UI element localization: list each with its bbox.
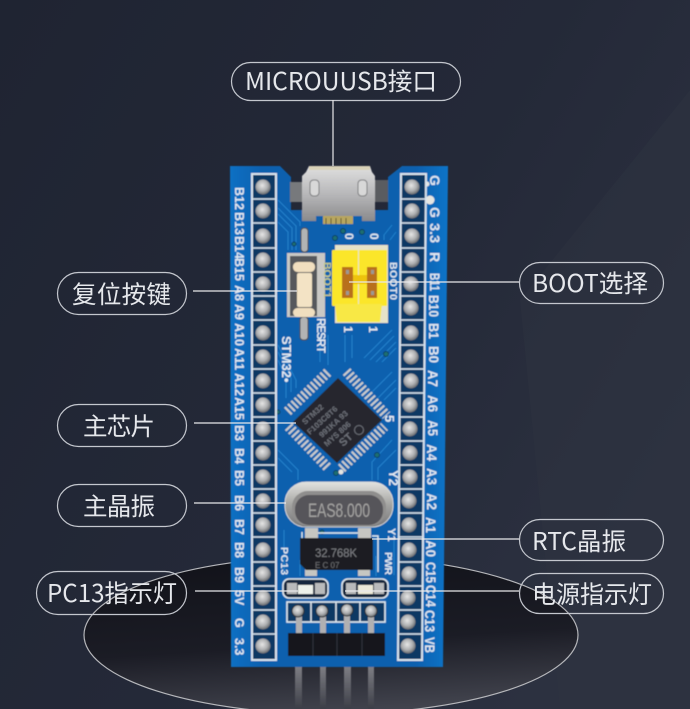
right pin labels: A0 bbox=[423, 540, 439, 557]
left pin labels: B9 bbox=[232, 567, 246, 583]
silkscreen marks: Y1 bbox=[385, 528, 397, 541]
label: RTC晶振: RTC晶振 bbox=[532, 523, 626, 558]
reset button bbox=[287, 228, 325, 340]
right pin labels: C15 bbox=[423, 562, 439, 583]
connector line: PC13 LED bbox=[195, 590, 298, 592]
connector line: BOOT bbox=[349, 281, 519, 283]
PC13 and PWR silkscreen: PC13 bbox=[278, 547, 290, 575]
reset silkscreen label: RESRT bbox=[314, 318, 326, 353]
right pin labels: A5 bbox=[425, 420, 441, 436]
left pin labels: 3.3 bbox=[232, 638, 246, 655]
left pin labels: B15 bbox=[232, 258, 246, 281]
left pin labels: B14 bbox=[232, 236, 246, 259]
right pin labels: A1 bbox=[423, 517, 439, 533]
main chip: ST bbox=[337, 431, 356, 449]
board traces bbox=[278, 200, 396, 576]
right pin labels: G bbox=[427, 207, 443, 218]
main chip: MYS 806 bbox=[322, 419, 353, 448]
label: 主晶振 bbox=[58, 484, 186, 526]
micro USB connector bbox=[290, 166, 388, 224]
left pin labels: A15 bbox=[232, 397, 246, 420]
left pin labels: B3 bbox=[232, 425, 246, 441]
background light wedge bbox=[520, 90, 690, 709]
vias bbox=[276, 228, 388, 534]
right pin labels: 3.3 bbox=[427, 223, 443, 243]
left pin labels: A9 bbox=[232, 304, 246, 320]
label: 主芯片 bbox=[58, 404, 186, 446]
RTC crystal 32.768K bbox=[300, 528, 378, 576]
right pin labels: A7 bbox=[425, 370, 441, 387]
main chip: STM32 bbox=[300, 402, 326, 426]
right pin labels: B0 bbox=[426, 346, 442, 363]
right pin labels: G bbox=[427, 175, 443, 186]
left pin labels: A10 bbox=[232, 323, 246, 346]
right pin labels: C14 bbox=[423, 585, 439, 607]
BOOT silkscreen marks: 1 bbox=[366, 326, 380, 333]
left pin labels: B4 bbox=[232, 448, 246, 464]
left pin labels: G bbox=[232, 618, 246, 628]
PC13 and PWR silkscreen bbox=[278, 547, 394, 575]
label: 主芯片: 主芯片 bbox=[83, 408, 155, 443]
BOOT silkscreen marks: BOOT0 bbox=[387, 262, 399, 300]
left pin labels: A12 bbox=[232, 373, 246, 396]
left pin labels: A11 bbox=[232, 348, 246, 370]
label: 复位按键: 复位按键 bbox=[72, 276, 171, 311]
elliptical pedestal bbox=[84, 556, 578, 709]
main chip: 991KA 93 bbox=[317, 409, 350, 439]
RTC crystal 32.768K: 32.768K bbox=[315, 548, 357, 560]
right pin labels: VB bbox=[422, 637, 438, 653]
PC13 LED bbox=[283, 579, 328, 598]
left pin labels bbox=[232, 187, 246, 655]
circuit board bbox=[230, 166, 448, 667]
BOOT silkscreen marks: 0 bbox=[367, 233, 381, 240]
connector line: power LED bbox=[345, 590, 519, 592]
right pin labels: R bbox=[427, 252, 443, 262]
right pin labels: A4 bbox=[424, 444, 440, 461]
right pin labels: B11 bbox=[427, 273, 443, 291]
right pin labels bbox=[422, 175, 443, 653]
silkscreen marks bbox=[382, 415, 401, 541]
label: BOOT选择 bbox=[520, 262, 664, 304]
BOOT silkscreen marks: 0 bbox=[342, 233, 356, 240]
label: 主晶振: 主晶振 bbox=[83, 488, 155, 523]
label: 电源指示灯: 电源指示灯 bbox=[532, 576, 652, 611]
main chip bbox=[288, 372, 386, 468]
right pin labels: B10 bbox=[426, 295, 442, 317]
BOOT silkscreen marks: 1 bbox=[341, 326, 355, 333]
right pin header bbox=[398, 174, 426, 660]
left pin labels: B6 bbox=[232, 495, 246, 511]
bottom header bbox=[287, 602, 385, 656]
silkscreen marks: 5 bbox=[382, 415, 397, 422]
left pin labels: A8 bbox=[232, 285, 246, 301]
label: 复位按键 bbox=[58, 272, 186, 314]
left pin labels: B13 bbox=[232, 212, 246, 235]
RTC crystal 32.768K: E C 07 bbox=[315, 561, 340, 570]
silkscreen marks: Y2 bbox=[386, 470, 401, 486]
left pin labels: 5V bbox=[232, 590, 246, 606]
BOOT switch bbox=[332, 245, 388, 323]
BOOT silkscreen marks bbox=[321, 233, 399, 333]
PC13 and PWR silkscreen: PWR bbox=[382, 552, 394, 575]
right pin labels: A2 bbox=[424, 493, 440, 510]
connector line: reset bbox=[193, 290, 297, 292]
STM32 silkscreen label: STM32• bbox=[279, 336, 294, 383]
connector line: chip bbox=[194, 422, 296, 424]
development board bbox=[230, 166, 448, 709]
right pin labels: A3 bbox=[424, 468, 440, 485]
header pins below the board bbox=[295, 655, 374, 709]
crystal 8 MHz bbox=[285, 482, 393, 527]
connector line: USB bbox=[332, 100, 334, 166]
left pin header bbox=[252, 174, 276, 660]
connector line: RTC bbox=[372, 538, 519, 540]
label: RTC晶振 bbox=[520, 520, 664, 560]
label: BOOT选择: BOOT选择 bbox=[532, 265, 648, 300]
white vias bbox=[338, 182, 434, 474]
crystal 8 MHz: EAS8.000 bbox=[308, 501, 370, 522]
label: PC13指示灯: PC13指示灯 bbox=[47, 575, 177, 610]
right pin labels: A6 bbox=[425, 395, 441, 412]
left pin labels: B7 bbox=[232, 519, 246, 535]
left pin labels: B5 bbox=[232, 470, 246, 486]
right pin labels: B1 bbox=[426, 323, 442, 339]
main chip: F103C8T6 bbox=[305, 404, 340, 436]
left pin labels: B12 bbox=[232, 187, 246, 210]
BOOT silkscreen marks: BOOT1 bbox=[321, 262, 333, 298]
right pin labels: C13 bbox=[422, 610, 438, 632]
label: MICROUUSB接口: MICROUUSB接口 bbox=[245, 63, 437, 98]
connector line: crystal bbox=[194, 502, 286, 504]
left pin labels: B8 bbox=[232, 542, 246, 558]
power LED bbox=[342, 579, 388, 598]
